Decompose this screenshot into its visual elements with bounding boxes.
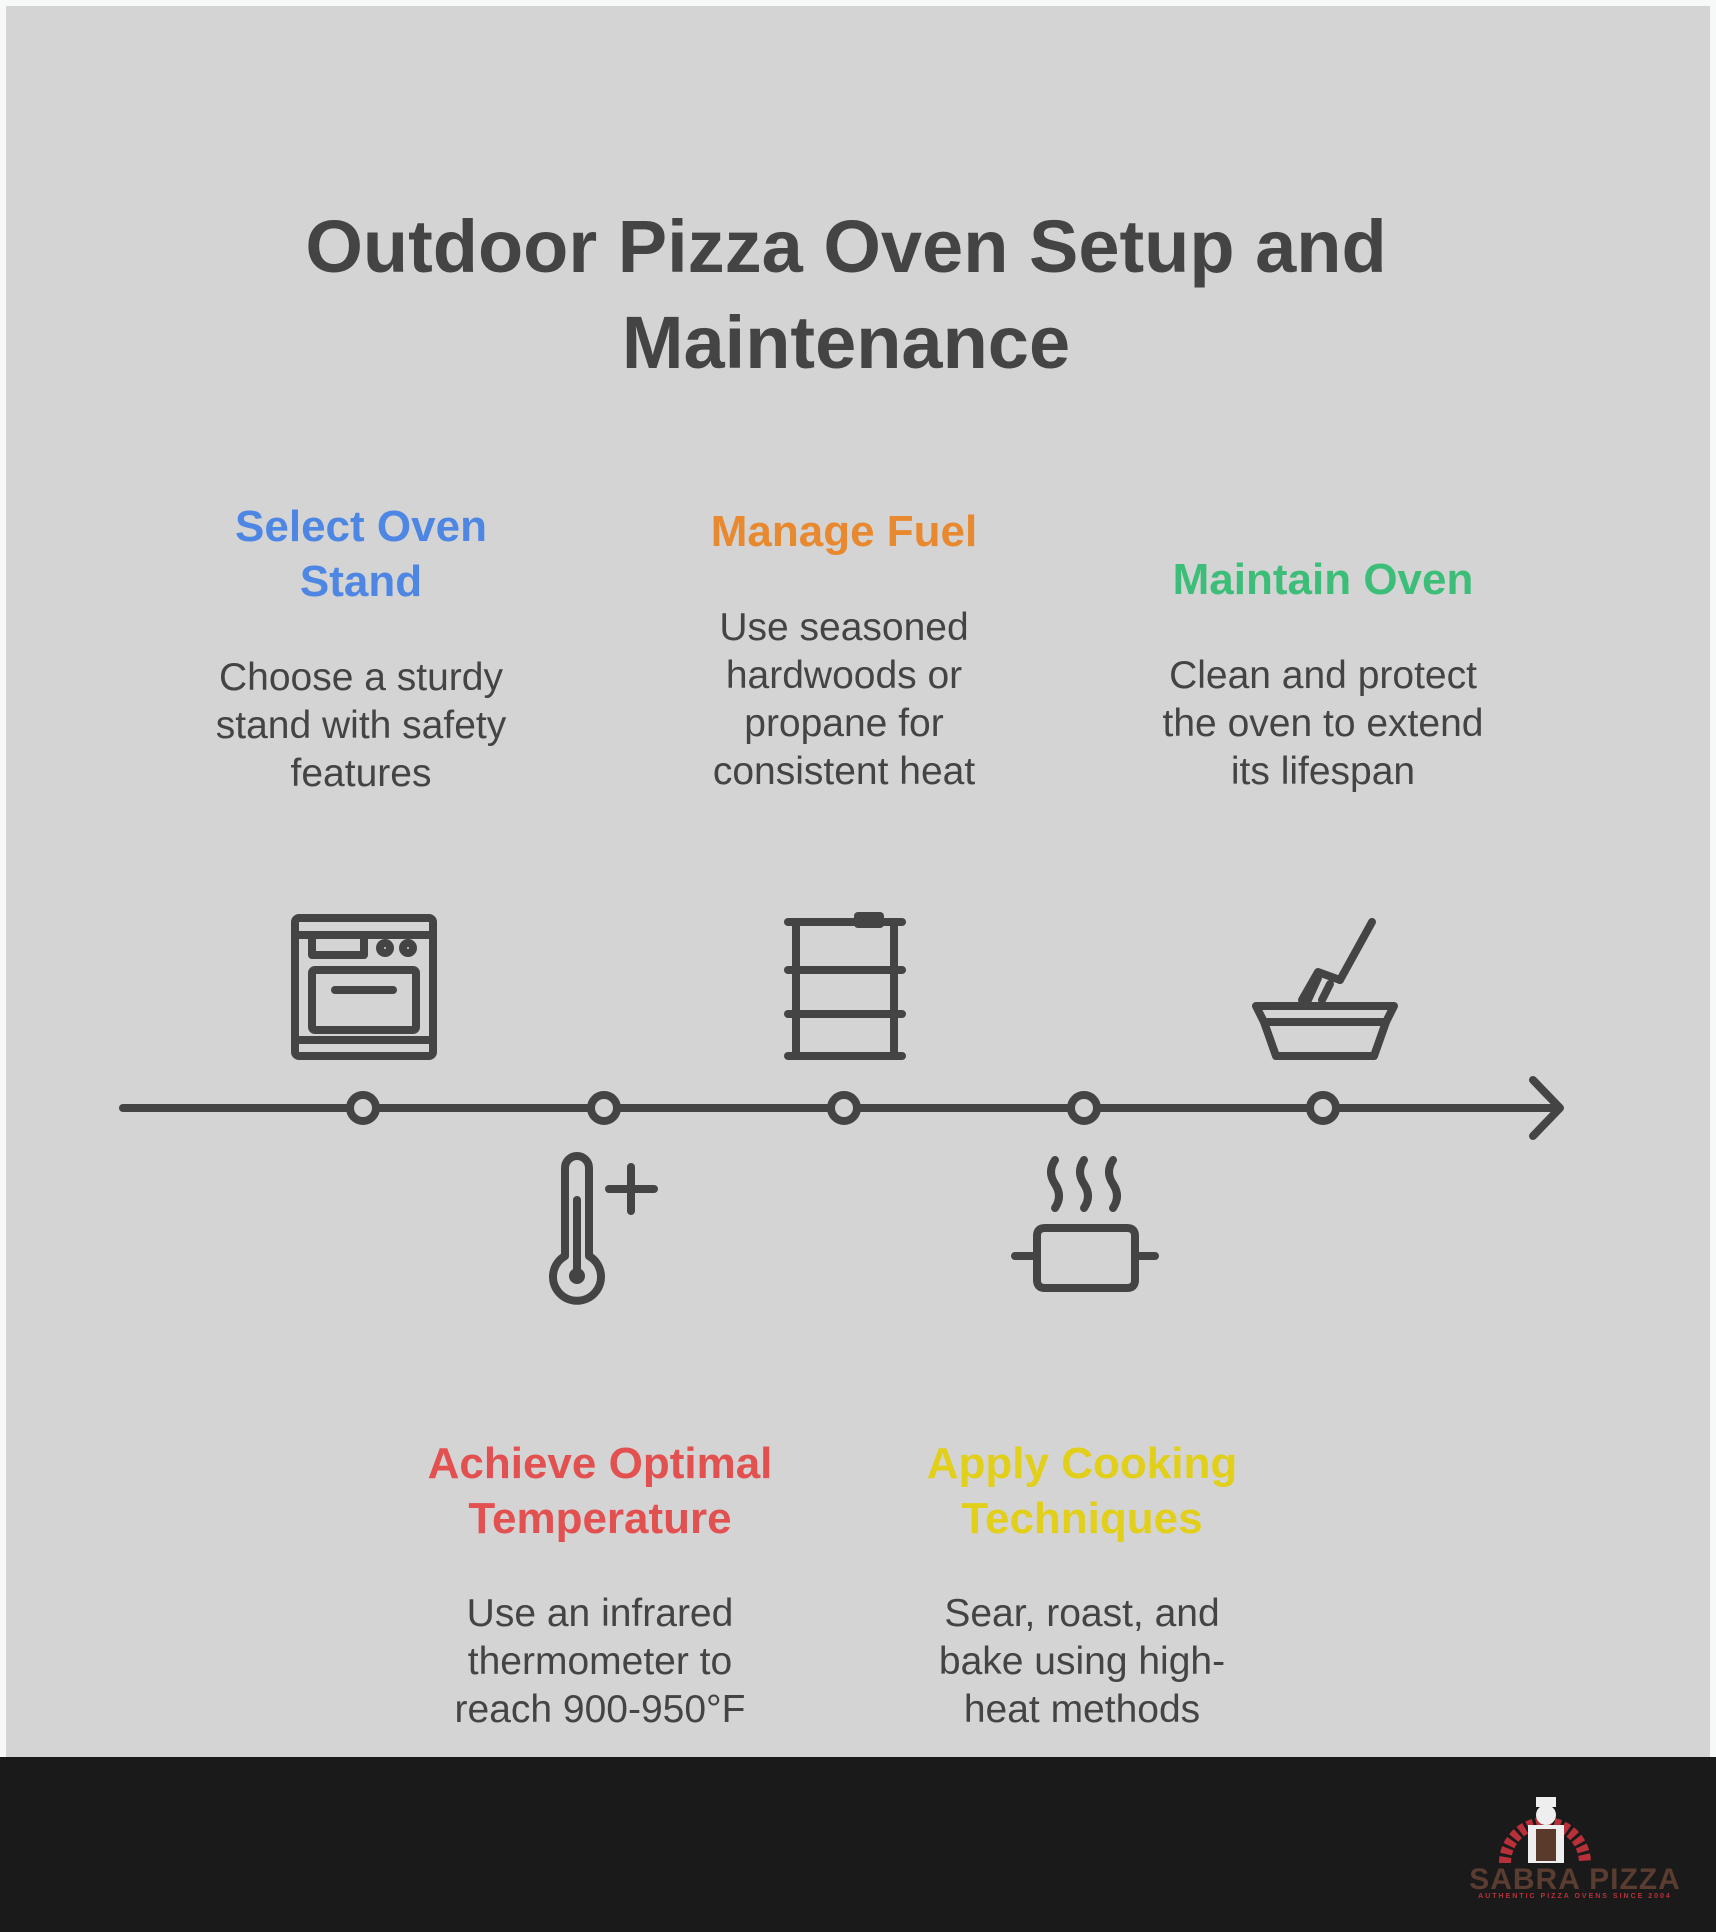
title: Maintenance [622,301,1070,384]
icon: steaming dish [1015,1160,1155,1288]
step: maintain oven: its lifespan [1231,750,1415,793]
step: apply cooking techniques: Apply Cooking [927,1439,1237,1488]
logo: sabra pizza: AUTHENTIC PIZZA OVENS SINCE 2004 [1478,1893,1672,1900]
step: select oven stand: stand with safety [216,704,506,747]
step: select oven stand: Stand [300,557,422,606]
title: Outdoor Pizza Oven Setup and [305,205,1387,288]
timeline arrow [123,1080,1560,1136]
step: achieve optimal temperature: reach 900-950°F [455,1688,745,1731]
step: select oven stand: Choose a sturdy [219,656,503,699]
step: select oven stand [216,502,506,795]
icon: thermometer [553,1156,654,1301]
step: apply cooking techniques: Techniques [961,1494,1203,1543]
footer bar [0,1757,1716,1932]
icon: oven [295,918,433,1056]
step: manage fuel: propane for [744,702,944,745]
step: apply cooking techniques: bake using high- [939,1640,1225,1683]
step: apply cooking techniques [927,1439,1237,1731]
step: maintain oven: the oven to extend [1163,702,1483,745]
step: manage fuel: consistent heat [713,750,975,793]
step: apply cooking techniques: heat methods [964,1688,1200,1731]
step: manage fuel: Use seasoned [719,606,969,649]
logo: sabra pizza [1469,1797,1681,1900]
step: maintain oven: Clean and protect [1169,654,1477,697]
step: maintain oven [1163,555,1483,793]
step: achieve optimal temperature: Achieve Optimal [428,1439,772,1488]
step: achieve optimal temperature [428,1439,772,1731]
step: select oven stand: Select Oven [235,502,487,551]
step: select oven stand: features [291,752,431,795]
step: achieve optimal temperature: Temperature [468,1494,732,1543]
step: maintain oven: Maintain Oven [1173,555,1473,604]
title [305,205,1387,384]
step: achieve optimal temperature: thermometer to [468,1640,732,1683]
step: manage fuel [711,507,977,793]
step: manage fuel: hardwoods or [726,654,962,697]
step: manage fuel: Manage Fuel [711,507,977,556]
icon: cleaning bowl [1256,922,1394,1056]
step: achieve optimal temperature: Use an infrared [467,1592,733,1635]
icon: fuel barrel [788,916,902,1056]
logo: sabra pizza: SABRA PIZZA [1469,1863,1681,1896]
step: apply cooking techniques: Sear, roast, and [944,1592,1220,1635]
